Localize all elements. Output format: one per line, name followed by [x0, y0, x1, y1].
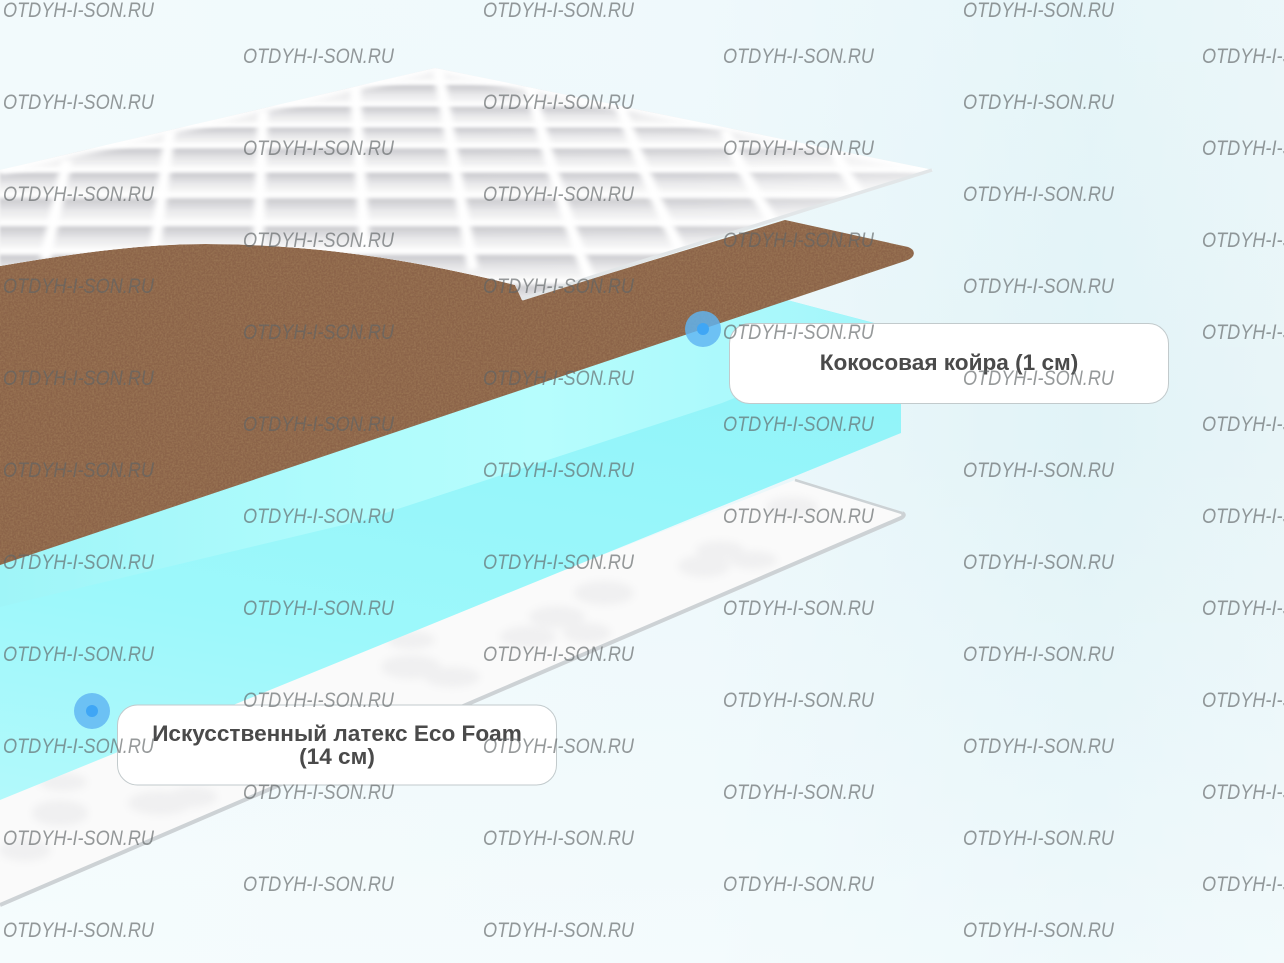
- watermarks: OTDYH-I-SON.RU: [3, 827, 155, 850]
- callout: artificial latex: [118, 705, 556, 785]
- watermarks: OTDYH-I-SON.RU: [723, 45, 875, 68]
- watermarks: OTDYH-I-SON.RU: [243, 321, 395, 344]
- watermarks: OTDYH-I-SON.RU: [483, 367, 635, 390]
- watermarks: OTDYH-I-SON.RU: [963, 91, 1115, 114]
- watermarks: OTDYH-I-SON.RU: [963, 735, 1115, 758]
- watermarks: OTDYH-I-SON.RU: [483, 735, 635, 758]
- watermarks: OTDYH-I-SON.RU: [483, 919, 635, 942]
- watermarks: OTDYH-I-SON.RU: [723, 229, 875, 252]
- watermarks: OTDYH-I-SON.RU: [483, 91, 635, 114]
- watermarks: OTDYH-I-SON.RU: [243, 597, 395, 620]
- watermarks: OTDYH-I-SON.RU: [3, 275, 155, 298]
- watermarks: OTDYH-I-SON.RU: [963, 183, 1115, 206]
- marker: coconut coir: [685, 311, 721, 347]
- watermarks: OTDYH-I-SON.RU: [243, 873, 395, 896]
- watermarks: OTDYH-I-SON.RU: [3, 459, 155, 482]
- watermarks: OTDYH-I-SON.RU: [3, 643, 155, 666]
- top quilted cover: [0, 58, 940, 310]
- watermarks: OTDYH-I-SON.RU: [483, 643, 635, 666]
- watermarks: OTDYH-I-SON.RU: [3, 735, 155, 758]
- watermarks: OTDYH-I-SON.RU: [3, 919, 155, 942]
- watermarks: OTDYH-I-SON.RU: [723, 689, 875, 712]
- watermarks: OTDYH-I-SON.RU: [963, 459, 1115, 482]
- watermarks: OTDYH-I-SON.RU: [963, 827, 1115, 850]
- watermarks: OTDYH-I-SON.RU: [963, 367, 1115, 390]
- watermarks: OTDYH-I-SON.RU: [723, 137, 875, 160]
- watermarks: OTDYH-I-SON.RU: [723, 597, 875, 620]
- watermarks: OTDYH-I-SON.RU: [963, 551, 1115, 574]
- watermarks: OTDYH-I-SON.RU: [3, 551, 155, 574]
- watermarks: OTDYH-I-SON.RU: [963, 643, 1115, 666]
- watermarks: OTDYH-I-SON.RU: [963, 919, 1115, 942]
- callout: coconut coir: Кокосовая койра (1 см): [820, 350, 1078, 375]
- watermarks: OTDYH-I-SON.RU: [243, 45, 395, 68]
- watermarks: OTDYH-I-SON.RU: [243, 505, 395, 528]
- watermarks: OTDYH-I-SON.RU: [243, 229, 395, 252]
- marker: artificial latex: [74, 693, 110, 729]
- watermarks: OTDYH-I-SON.RU: [483, 459, 635, 482]
- watermarks: OTDYH-I-SON.RU: [243, 137, 395, 160]
- watermarks: OTDYH-I-SON.RU: [723, 413, 875, 436]
- callout: coconut coir: [730, 324, 1168, 404]
- coconut coir layer: [0, 220, 914, 565]
- watermarks: OTDYH-I-SON.RU: [723, 321, 875, 344]
- watermarks: OTDYH-I-SON.RU: [3, 367, 155, 390]
- watermarks: OTDYH-I-SON.RU: [483, 275, 635, 298]
- watermarks: OTDYH-I-SON.RU: [3, 183, 155, 206]
- callout: artificial latex: (14 см): [299, 744, 375, 769]
- watermarks: OTDYH-I-SON.RU: [483, 183, 635, 206]
- watermarks: OTDYH-I-SON.RU: [963, 275, 1115, 298]
- watermarks: OTDYH-I-SON.RU: [3, 91, 155, 114]
- watermarks: OTDYH-I-SON.RU: [243, 413, 395, 436]
- watermarks: OTDYH-I-SON.RU: [243, 689, 395, 712]
- foam layer: artificial latex: [0, 300, 901, 800]
- watermarks: OTDYH-I-SON.RU: [243, 781, 395, 804]
- watermarks: OTDYH-I-SON.RU: [723, 781, 875, 804]
- watermarks: OTDYH-I-SON.RU: [723, 873, 875, 896]
- bottom layer: white perforated sheet: [0, 480, 904, 907]
- watermarks: OTDYH-I-SON.RU: [483, 551, 635, 574]
- callout: artificial latex: Искусственный латекс Eco Foam: [152, 721, 522, 746]
- watermarks: OTDYH-I-SON.RU: [483, 827, 635, 850]
- watermarks: OTDYH-I-SON.RU: [723, 505, 875, 528]
